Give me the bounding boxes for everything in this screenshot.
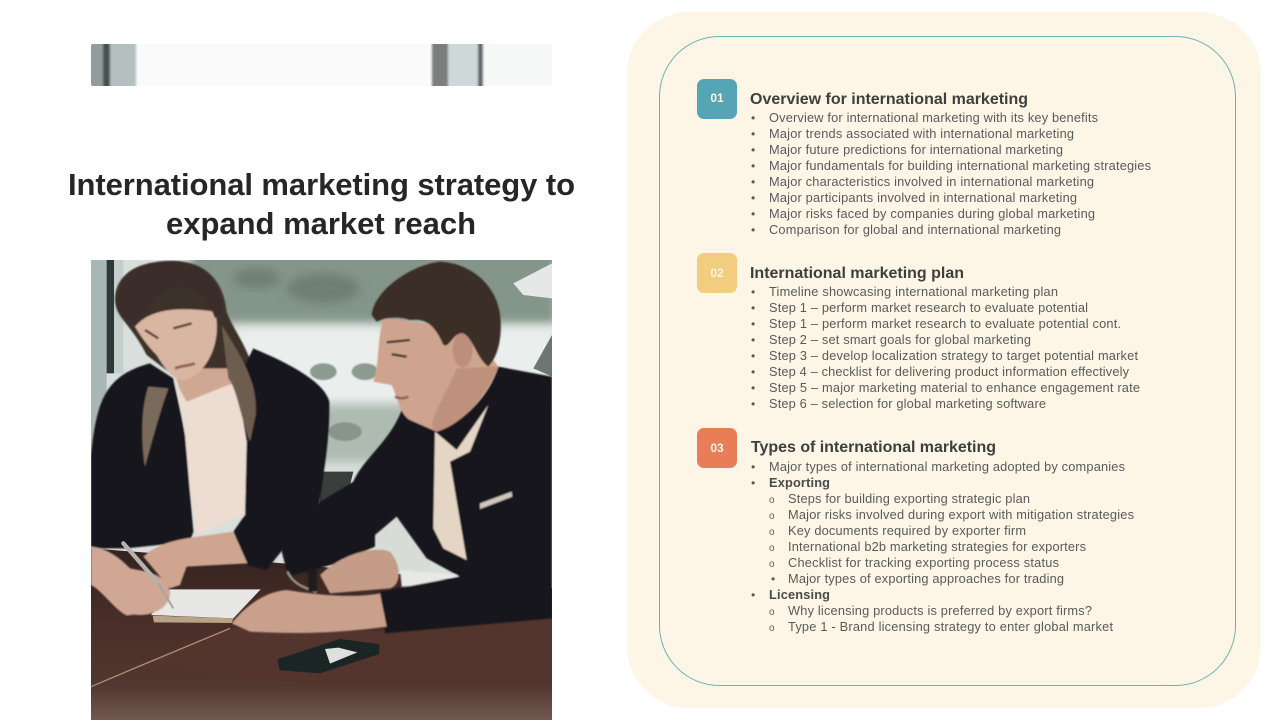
badge 01: 01: [710, 91, 724, 105]
list 03: o: [769, 511, 775, 522]
photo: two colleagues writing at a table: [90, 245, 557, 720]
list 01: •: [751, 207, 755, 221]
list 02: Timeline showcasing international marketing plan: [769, 284, 1058, 299]
list 01: Major future predictions for international marketing: [769, 142, 1063, 157]
badge 03: [697, 428, 737, 468]
list 03: Major risks involved during export with mitigation strategies: [788, 507, 1134, 522]
list 03: Checklist for tracking exporting process status: [788, 555, 1059, 570]
list 02: •: [751, 381, 755, 395]
panel: agenda background: [627, 12, 1261, 708]
list 02: •: [751, 397, 755, 411]
list 01: Major participants involved in international marketing: [769, 190, 1077, 205]
section 01: [697, 79, 1151, 237]
list 02: Step 5 – major marketing material to enhance engagement rate: [769, 380, 1140, 395]
panel: agenda inner outline: [660, 36, 1236, 686]
notebook: [151, 589, 261, 623]
list 01: •: [751, 191, 755, 205]
list 03: •: [771, 572, 775, 586]
list 02: •: [751, 365, 755, 379]
list 01: Major characteristics involved in international marketing: [769, 174, 1094, 189]
man: [232, 262, 552, 633]
list 01: Comparison for global and international marketing: [769, 222, 1061, 237]
list 02: [751, 284, 1140, 411]
badge 01: [697, 79, 737, 119]
section 03: [697, 428, 1134, 634]
list 02: •: [751, 333, 755, 347]
list 01: •: [751, 111, 755, 125]
list 01: •: [751, 223, 755, 237]
title: International marketing strategy to: [68, 167, 575, 202]
list 03: Exporting: [769, 475, 830, 490]
list 03: Key documents required by exporter firm: [788, 523, 1026, 538]
heading 02: International marketing plan: [750, 265, 964, 282]
list 01: •: [751, 175, 755, 189]
list 02: •: [751, 317, 755, 331]
title: expand market reach: [166, 206, 476, 241]
list 03: [751, 459, 1134, 634]
badge 02: 02: [710, 266, 724, 280]
list 03: •: [751, 588, 755, 602]
list 03: o: [769, 495, 775, 506]
list 03: o: [769, 623, 775, 634]
title: [68, 167, 575, 241]
list 03: •: [751, 460, 755, 474]
heading 01: Overview for international marketing: [750, 91, 1028, 108]
list 03: International b2b marketing strategies for exporters: [788, 539, 1086, 554]
list 03: Why licensing products is preferred by export firms?: [788, 603, 1092, 618]
list 02: Step 3 – develop localization strategy to target potential market: [769, 348, 1138, 363]
list 01: Major trends associated with international marketing: [769, 126, 1074, 141]
list 02: Step 1 – perform market research to evaluate potential cont.: [769, 316, 1121, 331]
list 03: Major types of exporting approaches for trading: [788, 571, 1064, 586]
list 02: •: [751, 285, 755, 299]
list 03: o: [769, 607, 775, 618]
list 03: •: [751, 476, 755, 490]
list 02: Step 6 – selection for global marketing software: [769, 396, 1046, 411]
badge 03: 03: [710, 441, 724, 455]
list 01: •: [751, 159, 755, 173]
section 02: [697, 253, 1140, 411]
list 02: Step 4 – checklist for delivering product information effectively: [769, 364, 1130, 379]
list 01: •: [751, 127, 755, 141]
list 03: Type 1 - Brand licensing strategy to enter global market: [788, 619, 1113, 634]
list 01: [751, 110, 1151, 237]
phone: [278, 640, 378, 672]
list 03: o: [769, 527, 775, 538]
image strip: window top: [91, 44, 552, 86]
list 03: Steps for building exporting strategic plan: [788, 491, 1030, 506]
list 01: Major fundamentals for building international marketing strategies: [769, 158, 1151, 173]
heading 03: Types of international marketing: [751, 439, 996, 456]
list 01: Overview for international marketing with its key benefits: [769, 110, 1098, 125]
list 01: •: [751, 143, 755, 157]
pen: [123, 543, 173, 608]
list 03: o: [769, 559, 775, 570]
woman: [91, 261, 329, 616]
list 02: •: [751, 349, 755, 363]
list 03: Major types of international marketing adopted by companies: [769, 459, 1125, 474]
badge 02: [697, 253, 737, 293]
list 03: o: [769, 543, 775, 554]
list 02: Step 1 – perform market research to evaluate potential: [769, 300, 1088, 315]
list 02: Step 2 – set smart goals for global marketing: [769, 332, 1031, 347]
table: [91, 548, 552, 720]
list 03: Licensing: [769, 587, 830, 602]
list 01: Major risks faced by companies during global marketing: [769, 206, 1095, 221]
list 02: •: [751, 301, 755, 315]
